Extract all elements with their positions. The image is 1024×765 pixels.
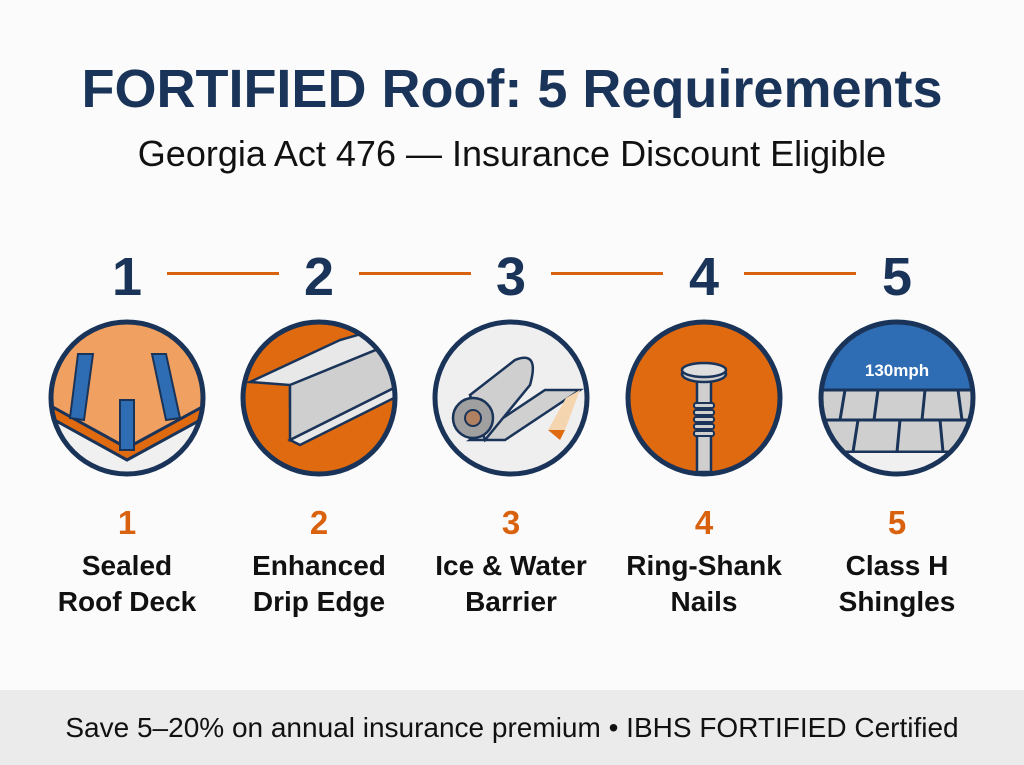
icon: class H shingles 130mph	[815, 320, 980, 483]
labels row: Class H	[846, 550, 948, 581]
footer band: Save 5–20% on annual insurance premium • IBHS FORTIFIED Certified	[65, 712, 959, 743]
step numbers row	[112, 247, 912, 307]
icon: drip edge	[243, 320, 410, 474]
title: FORTIFIED Roof: 5 Requirements	[81, 59, 943, 119]
labels row: 1	[118, 504, 136, 541]
labels row: Ice & Water	[435, 550, 587, 581]
labels row: Nails	[671, 586, 737, 617]
labels row: 5	[888, 504, 906, 541]
labels row: Barrier	[465, 586, 557, 617]
icons	[48, 320, 976, 476]
footer band	[0, 690, 1024, 765]
labels row	[58, 504, 955, 617]
step numbers row: 2	[304, 247, 334, 307]
labels row: 4	[695, 504, 713, 541]
step numbers row: 5	[882, 247, 912, 307]
subtitle: Georgia Act 476 — Insurance Discount Eligible	[138, 133, 886, 174]
labels row: Shingles	[839, 586, 955, 617]
step numbers row: 3	[496, 247, 526, 307]
icon: sealed roof deck	[40, 320, 215, 474]
labels row: 3	[502, 504, 520, 541]
icon: ice and water barrier roll	[435, 322, 587, 474]
step numbers row: 4	[689, 247, 719, 307]
labels row: 2	[310, 504, 328, 541]
labels row: Sealed	[82, 550, 172, 581]
icon: ring-shank nail	[628, 322, 780, 474]
labels row: Drip Edge	[253, 586, 385, 617]
step numbers row: 1	[112, 247, 142, 307]
labels row: Ring-Shank	[626, 550, 782, 581]
icon: class H shingles 130mph: 130mph	[865, 361, 929, 380]
labels row: Roof Deck	[58, 586, 196, 617]
labels row: Enhanced	[252, 550, 386, 581]
